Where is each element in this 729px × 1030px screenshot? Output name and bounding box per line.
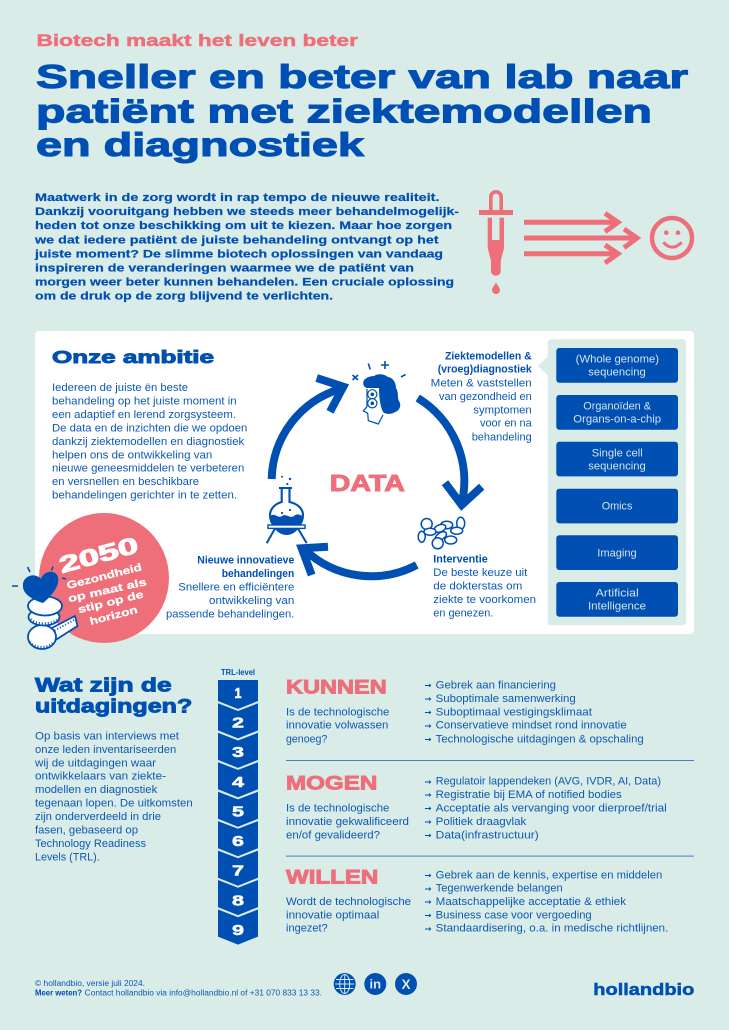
heading: wat zijn de uitdagingen: uitdagingen? bbox=[35, 695, 192, 717]
intro text bbox=[34, 192, 459, 303]
section: kunnen: Is de technologische bbox=[286, 706, 389, 718]
text: nieuwe behandelingen: Nieuwe innovatieve bbox=[197, 554, 294, 566]
section: kunnen bbox=[286, 676, 644, 745]
text: interventie: Interventie bbox=[433, 553, 488, 565]
panel: technologies: Artificial bbox=[596, 587, 639, 599]
text: nieuwe behandelingen: ontwikkeling van bbox=[209, 595, 294, 607]
logo: hollandbio: hollandbio bbox=[593, 981, 694, 999]
text: uitdagingen body: modellen en diagnostiek bbox=[35, 784, 158, 796]
title: en diagnostiek bbox=[36, 127, 364, 164]
icon: three arrows bbox=[524, 213, 637, 263]
section: willen: Tegenwerkende belangen bbox=[436, 883, 563, 895]
section: kunnen: innovatie volwassen bbox=[286, 720, 388, 732]
panel: technologies: sequencing bbox=[588, 367, 646, 379]
badge: 2050: stip op de bbox=[77, 589, 145, 616]
section: willen: innovatie optimaal bbox=[286, 909, 379, 921]
text: interventie bbox=[433, 553, 536, 620]
text: ziektemodellen: voor en na bbox=[480, 418, 532, 430]
section: willen: ingezet? bbox=[286, 923, 328, 935]
section: willen: → bbox=[424, 884, 432, 893]
footer text: Meer weten? bbox=[35, 989, 82, 998]
intro text: juiste moment? De slimme biotech oplossingen van vandaag bbox=[34, 248, 443, 260]
intro text: Dankzij vooruitgang hebben we steeds meer behandelmogelijk- bbox=[35, 206, 459, 218]
subtitle: Biotech maakt het leven beter bbox=[36, 32, 359, 50]
heading: onze ambitie: Onze ambitie bbox=[52, 347, 214, 367]
icon: X bbox=[395, 973, 417, 995]
footer text bbox=[35, 979, 322, 998]
section: mogen: Acceptatie als vervanging voor dierproef/trial bbox=[436, 802, 667, 814]
TRL chevrons 1 to 9: 9 bbox=[232, 922, 244, 939]
text: ziektemodellen: (vroeg)diagnostiek bbox=[438, 364, 532, 376]
footer text: © hollandbio, versie juli 2024. bbox=[35, 979, 145, 988]
section: mogen: en/of gevalideerd? bbox=[286, 829, 380, 841]
text: uitdagingen body: tegenaan lopen. De uitkomsten bbox=[35, 798, 193, 810]
section: mogen: → bbox=[424, 791, 432, 800]
section: kunnen: Gebrek aan financiering bbox=[436, 679, 556, 691]
badge: 2050: op maat als bbox=[67, 576, 148, 605]
panel: technologies bbox=[538, 339, 686, 625]
TRL chevrons 1 to 9: 1 bbox=[234, 685, 242, 702]
text: nieuwe behandelingen bbox=[166, 554, 294, 620]
section: kunnen: → bbox=[424, 708, 432, 717]
badge: 2050 bbox=[39, 513, 169, 643]
title bbox=[36, 59, 688, 164]
section: kunnen: Technologische uitdagingen & opschaling bbox=[436, 733, 644, 745]
badge: 2050: Gezondheid bbox=[65, 561, 143, 592]
text: interventie: ziekte te voorkomen bbox=[433, 594, 536, 606]
icon: smiley bbox=[652, 218, 692, 258]
section: mogen: → bbox=[424, 804, 432, 813]
icon: pipette bbox=[479, 192, 513, 294]
text: uitdagingen body: ontwikkelaars van ziekte- bbox=[35, 771, 166, 783]
section: mogen: Is de technologische bbox=[286, 802, 389, 814]
text: ambitie body bbox=[52, 382, 247, 502]
section: willen: → bbox=[424, 871, 432, 880]
TRL chevrons 1 to 9: 3 bbox=[232, 744, 244, 761]
section: kunnen: genoeg? bbox=[286, 733, 327, 745]
TRL chevrons 1 to 9: 7 bbox=[232, 863, 244, 880]
text: nieuwe behandelingen: Snellere en efficiëntere bbox=[178, 581, 294, 593]
text: ambitie body: dankzij ziektemodellen en diagnostiek bbox=[52, 436, 245, 448]
TRL chevrons 1 to 9: 4 bbox=[232, 774, 245, 791]
text: ziektemodellen: van gezondheid en bbox=[439, 391, 532, 403]
text: ambitie body: De data en de inzichten die we opdoen bbox=[52, 422, 247, 434]
icon: X: X bbox=[401, 977, 411, 992]
section: willen: Business case voor vergoeding bbox=[436, 909, 592, 921]
section: mogen bbox=[286, 772, 667, 841]
section: mogen: Regulatoir lappendeken (AVG, IVDR, AI, Data) bbox=[436, 776, 661, 788]
intro text: om de druk op de zorg blijvend te verlichten. bbox=[35, 291, 333, 303]
text: interventie: de dokterstas om bbox=[433, 580, 522, 592]
section: willen: Wordt de technologische bbox=[286, 896, 411, 908]
title: Sneller en beter van lab naar bbox=[36, 59, 688, 96]
text: uitdagingen body: wij de uitdagingen waar bbox=[34, 757, 156, 769]
intro text: we dat iedere patiënt de juiste behandeling ontvangt op het bbox=[34, 234, 439, 246]
section: mogen: Data(infrastructuur) bbox=[436, 829, 539, 841]
text: ambitie body: nieuwe geneesmiddelen te verbeteren bbox=[52, 463, 244, 475]
icon: heart with measuring tape bbox=[12, 566, 78, 649]
text: ambitie body: en versnellen en beschikbare bbox=[52, 476, 199, 488]
section: mogen: MOGEN bbox=[286, 772, 377, 794]
section: mogen: → bbox=[424, 831, 432, 840]
heading: wat zijn de uitdagingen: Wat zijn de bbox=[35, 675, 172, 697]
text: uitdagingen body: zijn onderverdeeld in drie bbox=[35, 811, 161, 823]
section: willen: Maatschappelijke acceptatie & ethiek bbox=[436, 896, 626, 908]
section: mogen: Registratie bij EMA of notified bodies bbox=[436, 789, 622, 801]
text: ambitie body: behandelingen gerichter in te zetten. bbox=[52, 490, 237, 502]
heading: wat zijn de uitdagingen bbox=[35, 675, 192, 717]
text: interventie: en genezen. bbox=[433, 608, 493, 620]
icon: pills bbox=[418, 517, 465, 549]
label: DATA: DATA bbox=[330, 470, 405, 496]
icon: head bbox=[352, 361, 406, 424]
text: uitdagingen body: Op basis van interviews met bbox=[35, 730, 180, 742]
text: nieuwe behandelingen: behandelingen bbox=[222, 568, 294, 580]
section: kunnen: Suboptimaal vestigingsklimaat bbox=[436, 706, 593, 718]
section: kunnen: → bbox=[424, 695, 432, 704]
section: kunnen: Suboptimale samenwerking bbox=[436, 693, 576, 705]
section: mogen: Politiek draagvlak bbox=[436, 816, 527, 828]
label: TRL-level: TRL-level bbox=[221, 668, 255, 677]
section: willen: WILLEN bbox=[286, 866, 378, 888]
text: nieuwe behandelingen: passende behandelingen. bbox=[166, 608, 294, 620]
icon: globe bbox=[334, 973, 356, 995]
intro text: Maatwerk in de zorg wordt in rap tempo de nieuwe realiteit. bbox=[35, 192, 440, 204]
TRL chevrons 1 to 9: 8 bbox=[232, 892, 244, 909]
icon: flask bbox=[267, 476, 307, 543]
section: kunnen: Conservatieve mindset rond innovatie bbox=[436, 720, 627, 732]
panel: technologies: Single cell bbox=[592, 447, 643, 459]
section: kunnen: → bbox=[424, 721, 432, 730]
text: uitdagingen body: onze leden inventariseerden bbox=[35, 744, 176, 756]
TRL chevrons 1 to 9: 2 bbox=[232, 714, 244, 732]
text: ziektemodellen bbox=[431, 350, 532, 443]
intro text: heden tot onze beschikking om uit te kiezen. Maar hoe zorgen bbox=[35, 220, 452, 232]
text: ambitie body: Iedereen de juiste ën beste bbox=[52, 382, 188, 394]
panel: technologies: Imaging bbox=[597, 548, 637, 560]
footer text: Contact hollandbio via info@hollandbio.nl of +31 070 833 13 33. bbox=[85, 989, 322, 998]
panel: technologies: Intelligence bbox=[588, 601, 646, 613]
text: interventie: De beste keuze uit bbox=[433, 567, 528, 579]
text: uitdagingen body: Levels (TRL). bbox=[35, 851, 100, 863]
title: patiënt met ziektemodellen bbox=[36, 94, 652, 130]
panel: technologies: sequencing bbox=[588, 461, 646, 473]
intro text: morgen weer beter kunnen behandelen. Een cruciale oplossing bbox=[35, 277, 454, 289]
TRL chevrons 1 to 9 bbox=[218, 680, 258, 945]
text: uitdagingen body: Technology Readiness bbox=[35, 838, 146, 850]
section: willen: → bbox=[424, 911, 432, 920]
intro text: inspireren de veranderingen waarmee we de patiënt van bbox=[35, 262, 414, 274]
section: willen: Standaardisering, o.a. in medische richtlijnen. bbox=[436, 923, 668, 935]
panel: technologies: Organs-on-a-chip bbox=[573, 414, 661, 426]
section: willen: → bbox=[424, 898, 432, 907]
panel: technologies: (Whole genome) bbox=[576, 353, 659, 365]
section: mogen: → bbox=[424, 777, 432, 786]
badge: 2050: 2050 bbox=[56, 532, 141, 578]
text: ziektemodellen: Ziektemodellen & bbox=[445, 350, 532, 362]
cycle arrows bbox=[272, 378, 482, 576]
section: willen bbox=[286, 866, 668, 935]
badge: 2050: horizon bbox=[88, 604, 139, 628]
icon: linkedin bbox=[364, 973, 386, 995]
TRL chevrons 1 to 9: 6 bbox=[232, 833, 244, 850]
text: uitdagingen body bbox=[34, 730, 193, 863]
icon: linkedin: in bbox=[370, 976, 381, 992]
TRL chevrons 1 to 9: 5 bbox=[232, 803, 244, 820]
section: willen: → bbox=[424, 924, 432, 933]
section: kunnen: → bbox=[424, 735, 432, 744]
section: mogen: → bbox=[424, 818, 432, 827]
section: kunnen: → bbox=[424, 681, 432, 690]
panel: technologies: Organoïden & bbox=[583, 400, 652, 412]
section: mogen: innovatie gekwalificeerd bbox=[286, 816, 409, 828]
panel: technologies: Omics bbox=[602, 501, 633, 513]
text: ziektemodellen: symptomen bbox=[473, 404, 532, 416]
text: ziektemodellen: Meten & vaststellen bbox=[431, 378, 532, 390]
text: ambitie body: behandeling op het juiste moment in bbox=[52, 395, 237, 407]
panel: onze ambitie bbox=[35, 331, 694, 634]
text: ambitie body: helpen ons de ontwikkeling van bbox=[52, 449, 212, 461]
section: kunnen: KUNNEN bbox=[286, 676, 387, 698]
section: willen: Gebrek aan de kennis, expertise en middelen bbox=[436, 869, 662, 881]
text: uitdagingen body: fasen, gebaseerd op bbox=[35, 825, 138, 837]
text: ambitie body: een adaptief en lerend zorgsysteem. bbox=[52, 409, 236, 421]
text: ziektemodellen: behandeling bbox=[472, 431, 532, 443]
